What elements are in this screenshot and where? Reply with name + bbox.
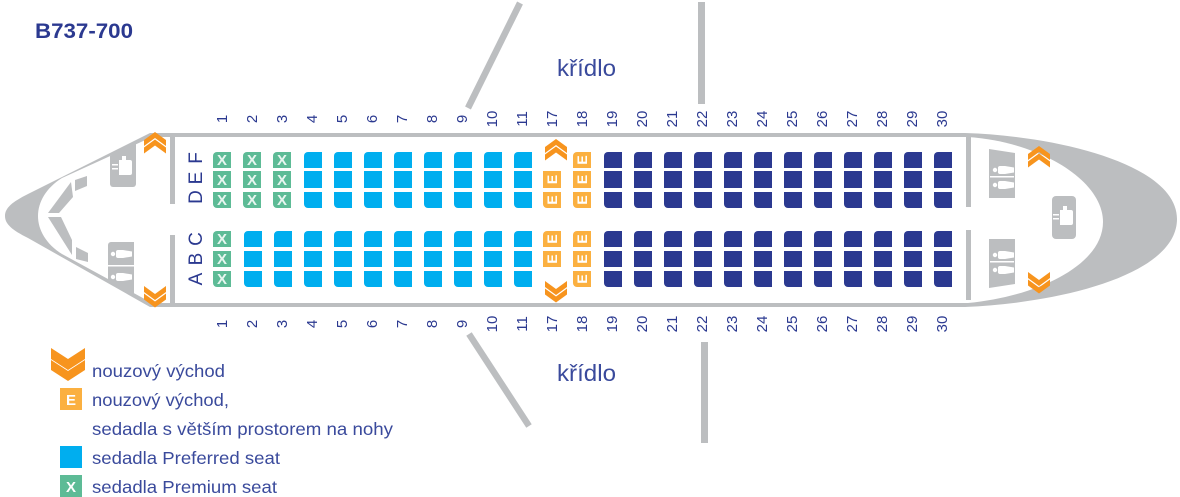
top row numbers: 29	[904, 111, 921, 127]
premium seats: X	[247, 152, 257, 169]
bottom row numbers: 30	[934, 316, 951, 332]
cockpit windows	[48, 176, 88, 262]
bottom row numbers: 7	[394, 320, 411, 328]
top row numbers: 27	[844, 111, 861, 127]
extra legroom exit seats	[543, 152, 591, 287]
top row numbers: 18	[574, 111, 591, 127]
bulkheads	[170, 135, 971, 303]
bottom row numbers: 4	[304, 320, 321, 328]
legend icon: premium seat: X	[66, 479, 76, 496]
premium seats: X	[217, 172, 227, 189]
bottom row numbers: 22	[694, 316, 711, 332]
seat letters: B	[186, 253, 207, 265]
bottom row numbers: 29	[904, 316, 921, 332]
bottom row numbers: 1	[214, 320, 231, 328]
upper wing vertical	[698, 2, 705, 104]
top row numbers: 30	[934, 111, 951, 127]
premium seats: X	[217, 251, 227, 268]
extra legroom exit seats: E	[544, 234, 560, 244]
premium seats: X	[277, 192, 287, 209]
legend text: preferred seat: sedadla Preferred seat	[92, 448, 280, 468]
extra legroom exit seats: E	[544, 175, 560, 184]
top row numbers: 5	[334, 115, 351, 123]
standard seats	[604, 152, 952, 287]
lower wing label: křídlo	[557, 360, 616, 386]
premium seats: X	[217, 152, 227, 169]
icon: front galley	[110, 142, 136, 187]
bottom row numbers: 17	[544, 316, 561, 332]
bottom row numbers: 11	[514, 316, 531, 332]
top row numbers	[214, 111, 951, 127]
seat letters	[186, 152, 207, 285]
legend text: emergency exit: nouzový východ	[92, 361, 225, 381]
icon: rear galley	[1052, 196, 1076, 239]
seat letters: D	[186, 190, 207, 204]
bottom row numbers: 28	[874, 316, 891, 332]
legend	[51, 348, 393, 497]
bottom row numbers: 25	[784, 316, 801, 332]
extra legroom exit seats: E	[544, 254, 560, 264]
top row numbers: 8	[424, 115, 441, 123]
premium seats: X	[277, 172, 287, 189]
bottom row numbers: 3	[274, 320, 291, 328]
extra legroom exit seats: E	[574, 155, 590, 165]
top row numbers: 26	[814, 111, 831, 127]
legend text: exit seats: nouzový východ,	[92, 390, 229, 410]
bottom row numbers	[214, 316, 951, 332]
premium seats: X	[217, 271, 227, 288]
seat letters: F	[186, 152, 207, 164]
top row numbers: 2	[244, 115, 261, 123]
bottom row numbers: 10	[484, 316, 501, 332]
top row numbers: 28	[874, 111, 891, 127]
bottom row numbers: 6	[364, 320, 381, 328]
legend text: extra legroom: sedadla s větším prostorem na nohy	[92, 419, 393, 439]
upper wing label: křídlo	[557, 55, 616, 81]
preferred seats	[244, 152, 532, 287]
top row numbers: 23	[724, 111, 741, 127]
icon: front lavatory	[108, 242, 134, 295]
top row numbers: 24	[754, 111, 771, 127]
top row numbers: 21	[664, 111, 681, 127]
exit chevrons	[144, 132, 1050, 308]
top row numbers: 9	[454, 115, 471, 123]
bottom row numbers: 26	[814, 316, 831, 332]
bottom row numbers: 9	[454, 320, 471, 328]
premium seats: X	[217, 231, 227, 248]
bottom row numbers: 23	[724, 316, 741, 332]
bottom row numbers: 5	[334, 320, 351, 328]
legend icon: E seat	[60, 388, 82, 410]
seat letters: C	[186, 232, 207, 246]
lower wing vertical	[701, 342, 708, 443]
top row numbers: 1	[214, 115, 231, 123]
top row numbers: 25	[784, 111, 801, 127]
premium seats: X	[277, 152, 287, 169]
extra legroom exit seats: E	[544, 195, 560, 205]
bottom row numbers: 19	[604, 316, 621, 332]
bottom row numbers: 27	[844, 316, 861, 332]
fuselage outline	[5, 133, 1177, 307]
bottom row numbers: 2	[244, 320, 261, 328]
seat letters: E	[186, 172, 207, 184]
premium seats: X	[247, 172, 257, 189]
icon: rear lavatory lower	[989, 239, 1015, 288]
bottom row numbers: 8	[424, 320, 441, 328]
bottom row numbers: 24	[754, 316, 771, 332]
legend icon: premium seat	[60, 475, 82, 497]
extra legroom exit seats: E	[574, 274, 590, 284]
upper wing diagonal	[468, 3, 520, 108]
top row numbers: 6	[364, 115, 381, 123]
extra legroom exit seats: E	[574, 175, 590, 184]
extra legroom exit seats: E	[574, 195, 590, 205]
legend icon: emergency exit chevron	[51, 348, 85, 381]
bottom row numbers: 20	[634, 316, 651, 332]
premium seats: X	[217, 192, 227, 209]
premium seats: X	[247, 192, 257, 209]
bottom row numbers: 18	[574, 316, 591, 332]
lower wing diagonal	[469, 334, 529, 426]
top row numbers: 19	[604, 111, 621, 127]
icon: rear lavatory upper	[989, 149, 1015, 198]
top row numbers: 10	[484, 111, 501, 127]
top row numbers: 11	[514, 111, 531, 127]
legend icon: E seat: E	[66, 392, 76, 409]
legend text: premium seat: sedadla Premium seat	[92, 477, 277, 497]
top row numbers: 17	[544, 111, 561, 127]
premium seats	[213, 152, 291, 288]
top row numbers: 22	[694, 111, 711, 127]
seat letters: A	[186, 272, 207, 285]
top row numbers: 4	[304, 115, 321, 123]
legend icon: preferred seat	[60, 446, 82, 468]
extra legroom exit seats: E	[574, 254, 590, 264]
top row numbers: 7	[394, 115, 411, 123]
bottom row numbers: 21	[664, 316, 681, 332]
extra legroom exit seats: E	[574, 234, 590, 244]
top row numbers: 3	[274, 115, 291, 123]
top row numbers: 20	[634, 111, 651, 127]
title: B737-700	[35, 20, 133, 43]
